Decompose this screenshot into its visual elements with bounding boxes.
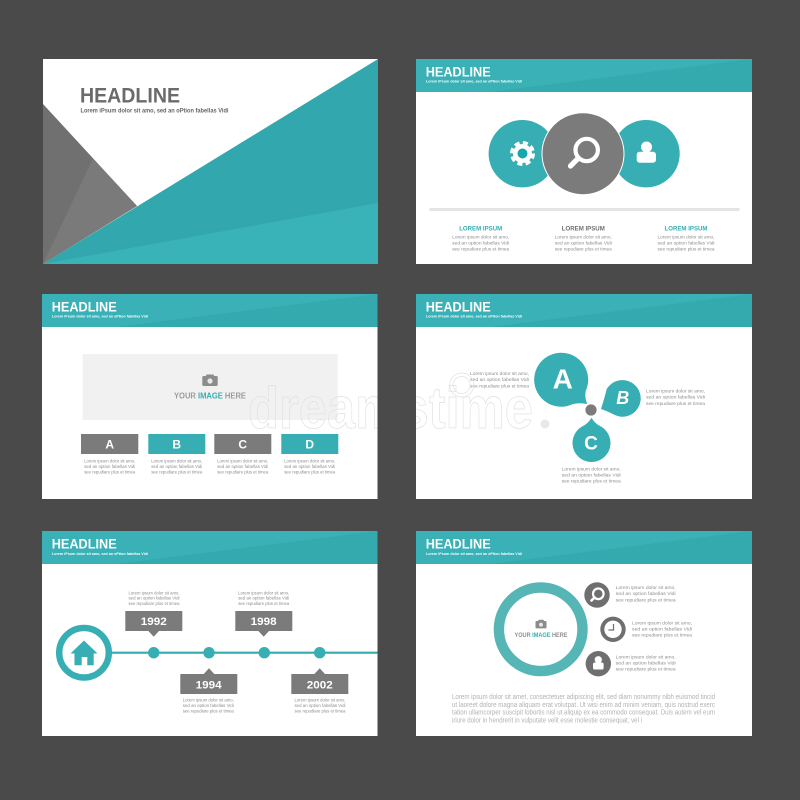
header band: Lorem iPsum dolor sit amo, sed an oPtion fabellas Vidi — [52, 314, 148, 319]
text column 1: see repudiare plus et timea — [452, 246, 510, 252]
bubble B: B — [616, 388, 629, 408]
text 1992: Lorem ipsum dolor sit amo, — [128, 590, 180, 596]
text: clock: see repudiare plus et timea — [632, 633, 692, 639]
text column 3: Lorem ipsum dolor sit amo, — [658, 234, 714, 240]
icon: gear circle — [489, 120, 556, 187]
tab D — [281, 434, 338, 454]
tab B text — [151, 458, 202, 475]
text C: Lorem ipsum dolor sit amo, — [562, 466, 621, 472]
tab A text: Lorem ipsum dolor sit amo, — [84, 458, 135, 464]
text column 3: LOREM IPSUM — [664, 226, 708, 233]
tab B text: Lorem ipsum dolor sit amo, — [151, 458, 202, 464]
image caption: YOUR IMAGE HERE — [514, 633, 568, 639]
image placeholder — [83, 354, 338, 420]
body paragraph: ut laoreet dolore magna aliquam erat volutpat. Ut wisi enim ad minim veniam, quis nostrud exerc — [452, 702, 715, 709]
text A: sed an option fabellas Vidi — [470, 377, 529, 383]
text: clock — [632, 620, 692, 639]
header band: HEADLINE — [426, 299, 491, 315]
tab A text: see repudiare plus et timea — [84, 469, 135, 475]
marker 1992 — [125, 611, 182, 637]
text 1994 — [183, 698, 234, 714]
tab D text: see repudiare plus et timea — [284, 469, 335, 475]
watermark: dreamstime — [248, 376, 533, 441]
header band: HEADLINE — [52, 536, 117, 552]
tab B: B — [172, 438, 181, 452]
text 1998: see repudiare plus et timea — [238, 601, 289, 607]
text column 3: see repudiare plus et timea — [658, 246, 715, 252]
text A — [470, 371, 529, 390]
icon: person — [586, 651, 611, 676]
text: person: sed an option fabellas Vidi — [616, 660, 676, 666]
text 1994: Lorem ipsum dolor sit amo, — [183, 698, 234, 704]
bubble A — [534, 353, 588, 407]
text 1998: sed an option fabellas Vidi — [238, 596, 289, 602]
tab C — [214, 434, 271, 454]
header band: Lorem iPsum dolor sit amo, sed an oPtion fabellas Vidi — [426, 79, 522, 84]
text B: Lorem ipsum dolor sit amo, — [646, 389, 705, 395]
text 1998: Lorem ipsum dolor sit amo, — [238, 590, 289, 596]
marker 1992: 1992 — [141, 616, 167, 628]
text column 1: LOREM IPSUM — [459, 226, 502, 233]
text 1994: sed an option fabellas Vidi — [183, 703, 234, 709]
header band: Lorem iPsum dolor sit amo, sed an oPtion fabellas Vidi — [426, 314, 522, 319]
tab C text: Lorem ipsum dolor sit amo, — [217, 458, 268, 464]
header band — [416, 531, 752, 564]
text column 2: LOREM IPSUM — [562, 226, 605, 233]
text C — [562, 466, 621, 485]
marker 1994 — [180, 668, 237, 694]
title: HEADLINE — [80, 85, 180, 108]
header band: HEADLINE — [426, 536, 491, 552]
body paragraph: iriure dolor in hendrerit in vulputate velit esse molestie consequat, vel i — [452, 718, 642, 724]
text 1994: see repudiare plus et timea — [183, 708, 234, 714]
text column 3: sed an option fabellas Vidi — [658, 240, 714, 246]
text column 2: Lorem ipsum dolor sit amo, — [555, 234, 612, 240]
text C: see repudiare plus et timea — [562, 479, 621, 485]
panel: title slide — [43, 59, 378, 264]
icon: magnifier — [584, 582, 610, 608]
text column 2: see repudiare plus et timea — [555, 246, 612, 252]
icon: camera — [536, 620, 546, 628]
text 1992 — [128, 590, 180, 607]
text column 1: Lorem ipsum dolor sit amo, — [452, 234, 509, 240]
tab C: C — [238, 438, 247, 452]
center dot — [585, 404, 597, 416]
marker 1998: 1998 — [251, 616, 277, 628]
header band: Lorem iPsum dolor sit amo, sed an oPtion fabellas Vidi — [426, 551, 522, 556]
text 1992: sed an option fabellas Vidi — [128, 596, 180, 602]
text C: sed an option fabellas Vidi — [562, 472, 621, 478]
text 2002 — [294, 698, 346, 714]
tab D text: sed an option fabellas Vidi — [284, 464, 335, 470]
subtitle: Lorem iPsum dolor sit amo, sed an oPtion fabellas Vidi — [80, 109, 229, 115]
tab C text: see repudiare plus et timea — [217, 469, 268, 475]
marker 1994: 1994 — [196, 679, 223, 691]
icon: camera — [202, 374, 218, 386]
tab B — [148, 434, 205, 454]
body paragraph: tation ullamcorper suscipit lobortis nisl ut aliquip ex ea commodo consequat. Duis autem vel eum — [452, 710, 715, 717]
text: magnifier — [616, 585, 676, 604]
marker 2002: 2002 — [307, 679, 333, 691]
header band — [42, 531, 378, 564]
bubble C — [572, 418, 610, 462]
tab B text: see repudiare plus et timea — [151, 469, 202, 475]
marker 2002 — [291, 668, 348, 694]
panel: ABC speech bubbles — [416, 294, 752, 499]
text 2002: sed an option fabellas Vidi — [294, 703, 346, 709]
image ring — [499, 588, 582, 671]
panel: timeline — [42, 531, 378, 736]
text column 1 — [452, 226, 510, 252]
text: person: Lorem ipsum dolor sit amo, — [616, 654, 676, 660]
text: clock: sed an option fabellas Vidi — [632, 626, 692, 632]
text column 2 — [555, 226, 612, 252]
teal diagonal — [43, 59, 378, 264]
tab A — [81, 434, 138, 454]
text B: see repudiare plus et timea — [646, 401, 705, 407]
tab B text: sed an option fabellas Vidi — [151, 464, 202, 470]
icon: home — [59, 628, 109, 678]
panel: ring with icons — [416, 531, 752, 736]
text column 2: sed an option fabellas Vidi — [555, 240, 612, 246]
text A: Lorem ipsum dolor sit amo, — [470, 371, 529, 377]
header band — [416, 294, 752, 327]
text: clock: Lorem ipsum dolor sit amo, — [632, 620, 692, 626]
tab A text — [84, 458, 135, 475]
text: person — [616, 654, 676, 673]
tab A text: sed an option fabellas Vidi — [84, 464, 135, 470]
text column 3 — [658, 226, 715, 252]
tab C text: sed an option fabellas Vidi — [217, 464, 268, 470]
text: magnifier: sed an option fabellas Vidi — [616, 591, 676, 597]
tab C text — [217, 458, 268, 475]
panel: image with four tabs — [42, 294, 378, 499]
text B: sed an option fabellas Vidi — [646, 395, 705, 401]
body paragraph: Lorem ipsum dolor sit amet, consectetuer adipiscing elit, sed diam nonummy nibh euismod tincid — [452, 694, 715, 701]
header band: HEADLINE — [426, 64, 491, 80]
body paragraph — [452, 694, 715, 724]
header band — [42, 294, 378, 327]
marker 1998 — [235, 611, 292, 637]
text 1998 — [238, 590, 289, 607]
text 1992: see repudiare plus et timea — [128, 601, 180, 607]
icon: person circle — [612, 120, 680, 187]
bubble C: C — [584, 434, 598, 454]
icon: magnifier circle — [542, 113, 624, 195]
tab D text — [284, 458, 335, 475]
header band: Lorem iPsum dolor sit amo, sed an oPtion fabellas Vidi — [52, 551, 148, 556]
text: person: see repudiare plus et timea — [616, 667, 676, 673]
text 2002: Lorem ipsum dolor sit amo, — [294, 698, 346, 704]
tab D: D — [305, 438, 314, 452]
text 2002: see repudiare plus et timea — [294, 708, 346, 714]
header band: HEADLINE — [52, 299, 117, 315]
text A: see repudiare plus et timea — [470, 384, 529, 390]
bubble A: A — [553, 364, 573, 394]
image caption: YOUR IMAGE HERE — [174, 391, 247, 400]
gray triangle — [43, 104, 137, 264]
icon: clock — [600, 617, 626, 642]
tab D text: Lorem ipsum dolor sit amo, — [284, 458, 335, 464]
panel: three circles — [416, 59, 752, 264]
timeline line and dots — [110, 647, 378, 658]
bubble B — [601, 380, 641, 417]
tab A: A — [105, 438, 114, 452]
text: magnifier: see repudiare plus et timea — [616, 598, 676, 604]
text column 1: sed an option fabellas Vidi — [452, 240, 509, 246]
text B — [646, 389, 705, 407]
header band — [416, 59, 752, 92]
text: magnifier: Lorem ipsum dolor sit amo, — [616, 585, 676, 591]
